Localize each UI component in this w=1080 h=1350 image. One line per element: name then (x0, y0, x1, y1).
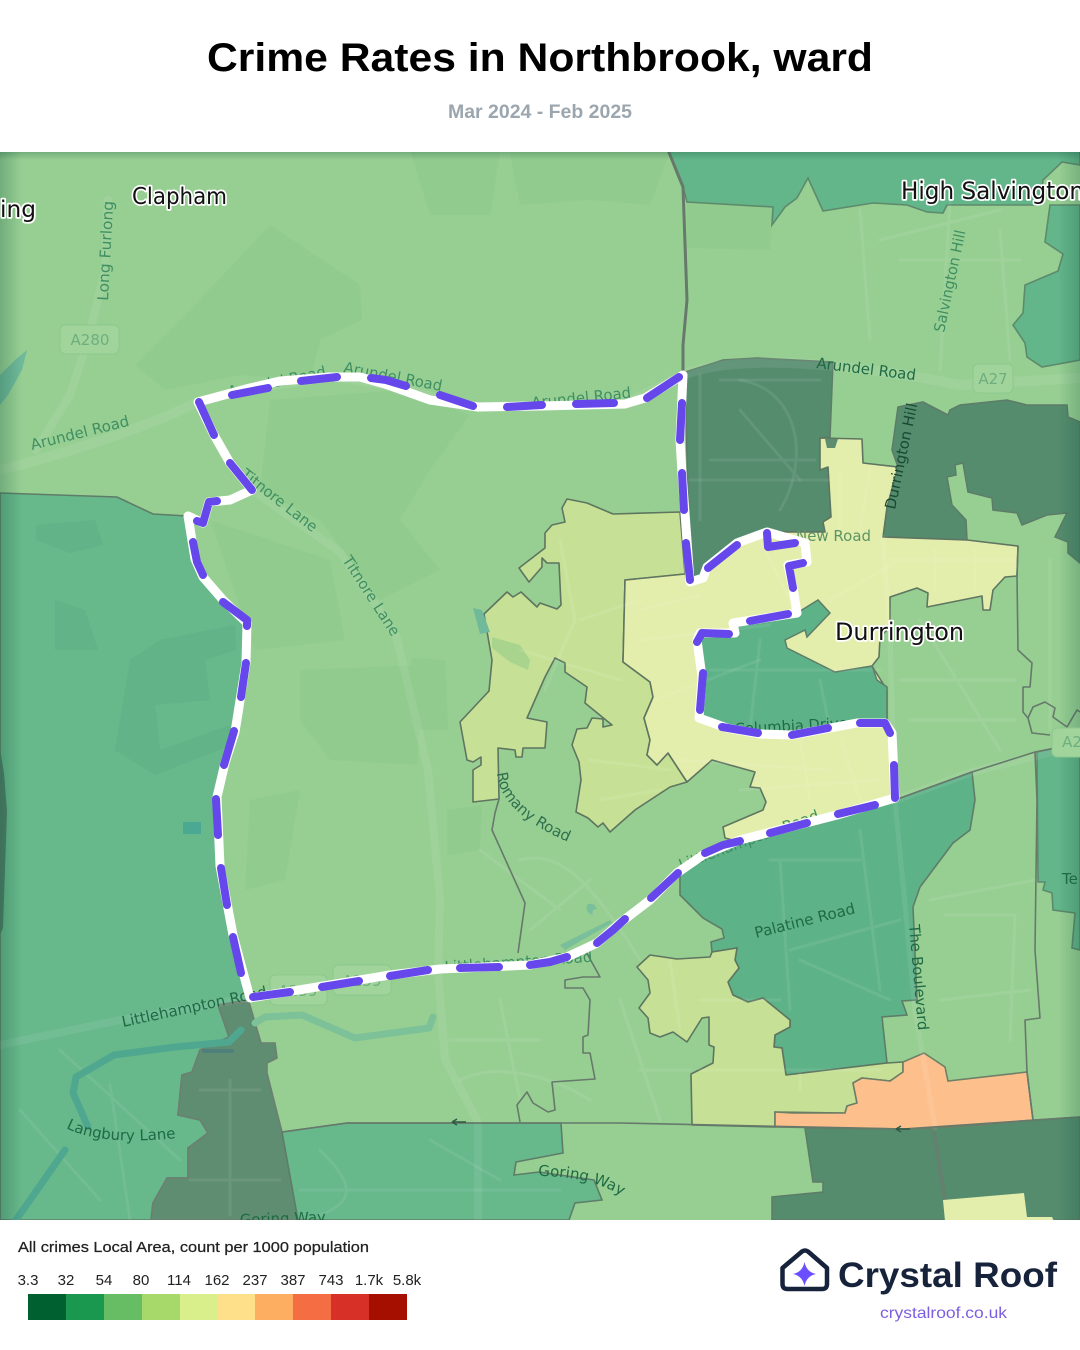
mid-green area: west (0, 493, 247, 1220)
road network (0, 200, 1080, 1220)
legend title: All crimes Local Area, count per 1000 population (18, 1239, 369, 1256)
url: crystalroof.co.uk (880, 1305, 1008, 1322)
road labels: Arundel Road (226, 363, 328, 401)
road labels: Romany Road (497, 772, 572, 842)
road shields: A259: A259 (343, 972, 381, 990)
road labels: Arundel Road (816, 354, 917, 384)
mid-green area: top band (668, 150, 1080, 225)
road labels: Arundel Road (531, 384, 632, 412)
boundary purple dashes (193, 377, 895, 997)
legend scale values: 80 (133, 1272, 149, 1289)
legend scale values: 3.3 (18, 1272, 38, 1289)
light yellow-green area: west of Durrington (460, 499, 687, 832)
road shield: A280 (60, 325, 119, 354)
road labels: Salvington Hill (930, 228, 970, 334)
dark strip: west edge (0, 749, 7, 935)
river: north-west (0, 350, 27, 405)
yellow area: Durrington (623, 438, 1018, 842)
dark area: south-east (772, 1117, 1080, 1220)
legend scale values: 743 (318, 1272, 344, 1289)
legend (18, 1239, 422, 1320)
road labels: Langbury Lane (67, 1118, 175, 1144)
legend scale values: 32 (58, 1272, 74, 1289)
legend scale values: 54 (96, 1272, 112, 1289)
ward boundaries (282, 150, 1080, 1132)
edge shading (0, 152, 18, 1220)
road labels: Arundel Road (29, 412, 131, 454)
dark area: south-west strip (151, 1002, 298, 1220)
road labels: Te (1061, 870, 1078, 888)
icon: house with star (782, 1250, 827, 1289)
mid-green area: Columbia Drive pocket (698, 600, 887, 735)
road shields: A259 (270, 965, 391, 1005)
orange area: highest crime (775, 1053, 1033, 1129)
place labels (0, 177, 1080, 646)
pale patch: south-east edge (943, 1193, 1054, 1221)
legend scale values: 1.7k (355, 1272, 384, 1289)
road shield: A280: A280 (71, 331, 109, 349)
mid-green area: south band (282, 1123, 602, 1220)
legend scale values: 162 (204, 1272, 230, 1289)
ward boundary: Northbrook (188, 375, 895, 998)
legend scale values: 114 (167, 1272, 191, 1289)
legend colour bar (28, 1294, 407, 1320)
road shield: A27: A27 (978, 370, 1008, 388)
boundary white outline (188, 375, 895, 998)
road labels: Littlehampton Road (444, 948, 593, 976)
mid-green area: Palatine Road (680, 772, 975, 1075)
place labels: ing (0, 197, 36, 223)
logo: Crystal Roof (782, 1250, 1057, 1322)
title: Crime Rates in Northbrook, ward (207, 36, 873, 80)
place labels: Clapham (132, 184, 227, 210)
pale patch: north of Durrington edge (825, 439, 838, 448)
road labels: Goring Way (240, 1208, 326, 1229)
road labels: Goring Way (539, 1164, 626, 1196)
road labels: Littlehampton Road (120, 983, 269, 1031)
legend scale values (18, 1272, 422, 1289)
pond: Littlehampton Road (560, 904, 612, 950)
road shield: A2 (1052, 728, 1080, 757)
pond: west of Durrington (473, 608, 490, 634)
road labels: Palatine Road (753, 899, 857, 942)
road labels: New Road (796, 527, 871, 545)
road shields: A259: A259 (279, 982, 317, 1000)
light yellow-green area: south (637, 948, 903, 1127)
road labels: Titnore Lane (237, 464, 321, 536)
road labels: Long Furlong (94, 200, 117, 301)
road shield: A27 (973, 364, 1013, 393)
road labels: Littlehampton Road (676, 806, 821, 874)
legend scale values: 237 (242, 1272, 268, 1289)
river: canal (16, 1015, 433, 1220)
subtitle: date range: Mar 2024 - Feb 2025 (448, 102, 632, 123)
road labels (32, 202, 1077, 1220)
legend scale values: 387 (280, 1272, 306, 1289)
map panel (0, 152, 1080, 1220)
dark area: north of ward (685, 358, 833, 582)
symbol: rail crossing west (452, 1119, 466, 1125)
road labels: Columbia Drive (734, 714, 848, 738)
wordmark: Crystal Roof (838, 1256, 1057, 1295)
mid-green area: north-east (1013, 205, 1080, 367)
pond: west field (183, 822, 201, 834)
road labels: Durrington Hill (881, 401, 921, 511)
dark area: north-east (883, 400, 1080, 563)
symbol: rail crossing east (896, 1126, 910, 1132)
place labels: Durrington (835, 618, 964, 646)
road labels: The Boulevard (905, 923, 932, 1031)
road labels: Arundel Road (342, 358, 444, 395)
road labels: Titnore Lane (338, 552, 404, 639)
mid-green area: east (1037, 743, 1080, 950)
road strip: south-east (933, 1128, 945, 1200)
legend scale values: 5.8k (393, 1272, 422, 1289)
